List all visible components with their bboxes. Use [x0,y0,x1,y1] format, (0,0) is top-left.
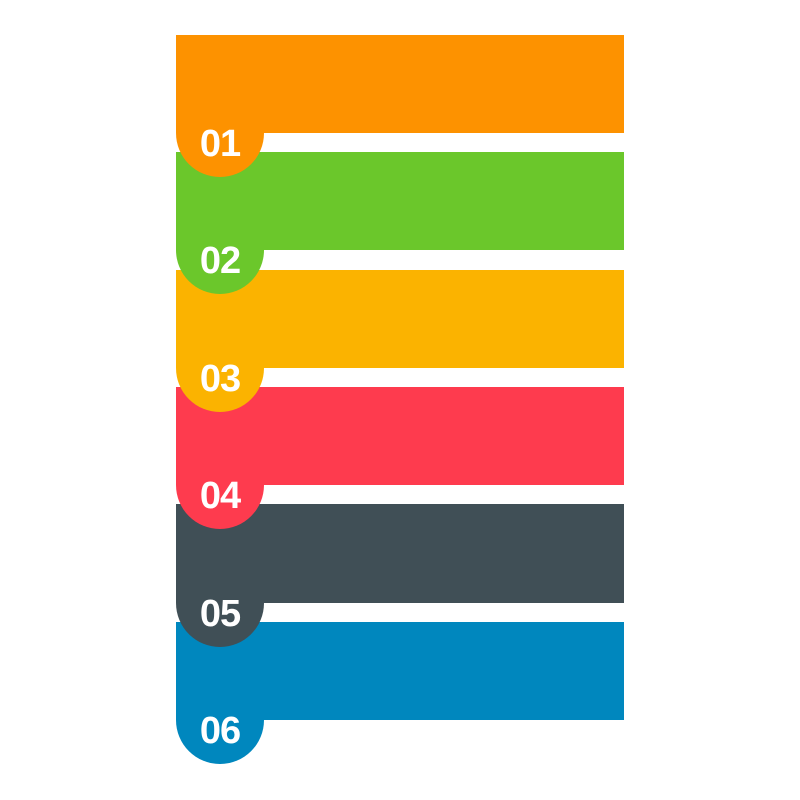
tab 04 [176,484,264,529]
bar 6 [176,622,624,720]
tab 02: 02 [200,240,240,282]
tab 06 [176,719,264,764]
tab 05: 05 [200,593,240,635]
tab 03 [176,367,264,412]
tab 01 [176,132,264,177]
bar 5 [176,504,624,603]
tab 03: 03 [200,358,240,400]
bar 2 [176,152,624,250]
tab 02 [176,249,264,294]
bar 1 [176,35,624,133]
tab 05 [176,602,264,647]
tab 06: 06 [200,710,240,752]
tab 04: 04 [200,475,240,517]
tab 01: 01 [200,123,240,165]
bar 3 [176,270,624,368]
bar 4 [176,387,624,485]
